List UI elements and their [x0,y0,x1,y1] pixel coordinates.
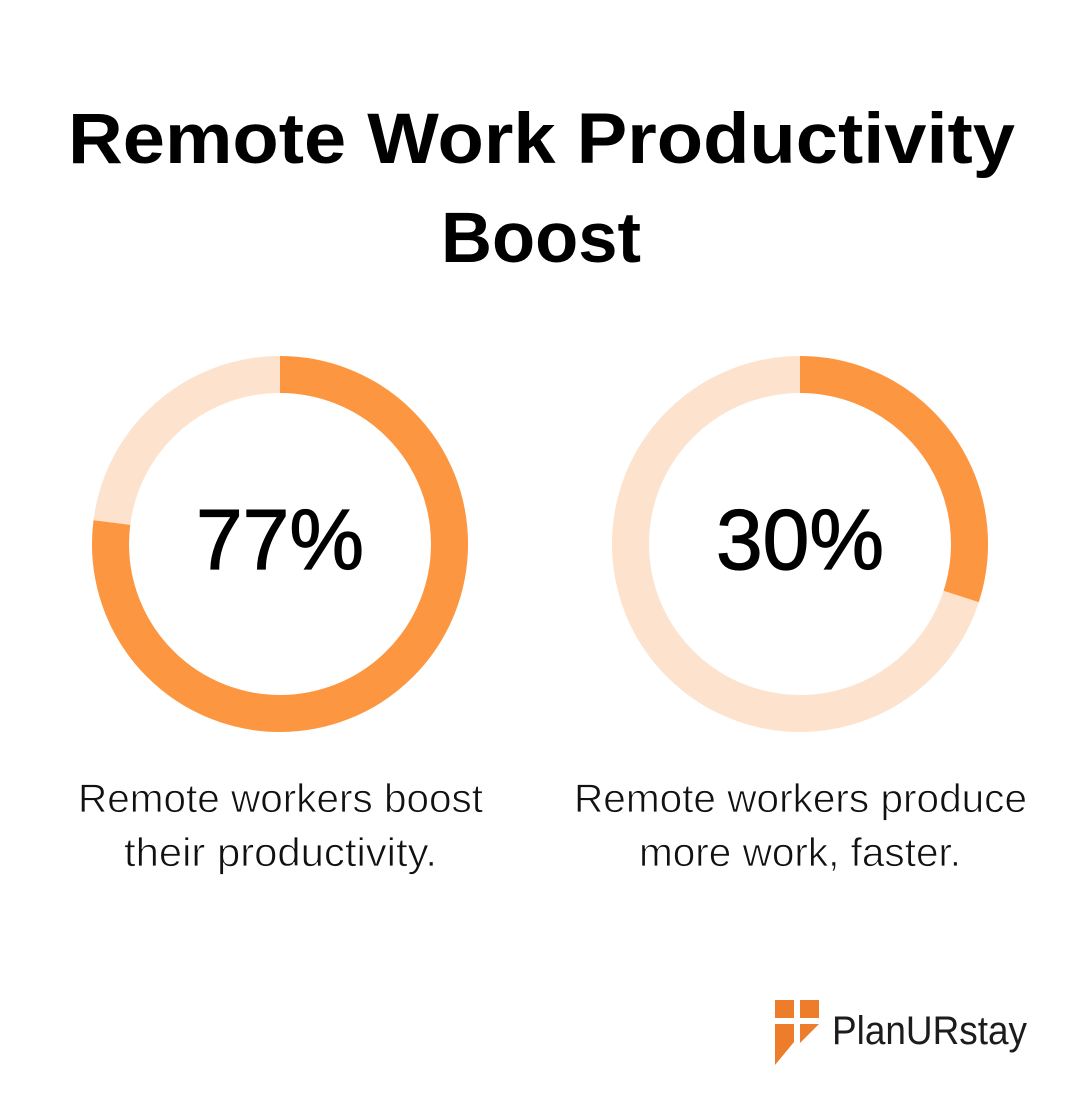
label: 30%: more work, faster. [639,831,961,875]
title: Remote Work Productivity [68,100,1016,179]
value: 77%: 77% [196,493,364,588]
label: 30%: Remote workers produce [574,777,1027,821]
label: 77%: their productivity. [124,831,437,875]
icon: logo mark [775,1000,819,1065]
panel: 30% stat [574,374,1027,875]
donut chart: 30% [630,374,970,714]
logo wordmark: PlanURstay [832,1009,1027,1053]
logo: PlanURstay [775,1000,1027,1065]
title: Boost [441,199,641,278]
title [68,100,1016,278]
label: 30% [574,777,1027,875]
label: 77%: Remote workers boost [78,777,483,821]
donut chart: 77% [110,374,450,714]
panel: 77% stat [78,374,483,875]
value: 30%: 30% [716,493,884,588]
label: 77% [78,777,483,875]
